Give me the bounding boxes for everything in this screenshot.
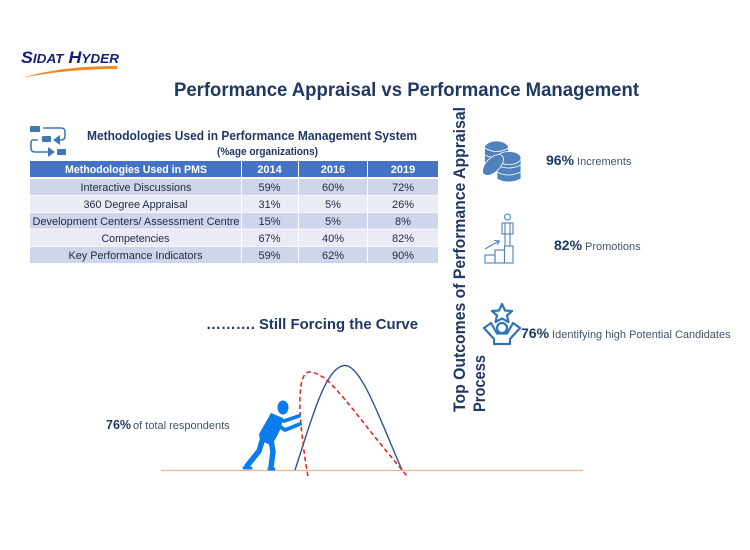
chart: bell curves [295,366,407,476]
table header row [65,164,415,176]
row: Development Centers [32,216,411,228]
row: Interactive Discussions: Interactive Discussions [80,182,192,194]
row: 360 Degree Appraisal: 31% [258,199,281,211]
icon: star person [484,304,520,344]
icon: person on steps [485,214,513,263]
row: Development Centers: Development Centers/ Assessment Centre [32,216,240,228]
table heading [87,129,417,158]
stat: 76% of total respondents: 76%of total respondents [106,418,230,432]
icon: coins [479,141,521,182]
row: 360 Degree Appraisal: 5% [325,199,341,211]
table header row: 2019 [391,164,415,176]
row: Key Performance Indicators: 59% [258,250,281,262]
subheading: still forcing the curve: ………. Still Forcing the Curve [206,316,418,333]
row: Competencies: 82% [392,233,414,245]
row: Key Performance Indicators [68,250,414,262]
row: 360 Degree Appraisal: 26% [392,199,414,211]
row: Interactive Discussions: 72% [392,182,414,194]
row: 360 Degree Appraisal [84,199,414,211]
vertical heading: top outcomes [451,107,489,412]
row: Competencies: 40% [322,233,344,245]
logo: Sidat Hyder [21,49,119,78]
row: Key Performance Indicators: 62% [322,250,344,262]
row: Development Centers: 8% [395,216,411,228]
row: Development Centers: 15% [258,216,281,228]
stat: 96% increments: 96% Increments [546,152,632,168]
icon: person pushing [244,400,300,469]
table: methodologies used in PMS [30,161,438,263]
table header row: 2014 [257,164,283,176]
table header row: 2016 [321,164,345,176]
icon: process flow [30,126,66,157]
row: Competencies: Competencies [102,233,170,245]
row: Interactive Discussions: 60% [322,182,344,194]
baseline axis [161,470,583,472]
vertical heading: top outcomes: Process [471,355,489,412]
vertical heading: top outcomes: Top Outcomes of Performance Appraisal [451,107,469,412]
row: Interactive Discussions: 59% [258,182,281,194]
table header row: Methodologies Used in PMS [65,164,207,176]
row: 360 Degree Appraisal: 360 Degree Appraisal [84,199,188,211]
row: Key Performance Indicators: 90% [392,250,414,262]
title: Performance Appraisal vs Performance Management [174,79,639,101]
stat: 82% promotions: 82% Promotions [554,237,641,253]
row: Interactive Discussions [80,182,414,194]
row: Key Performance Indicators: Key Performance Indicators [68,250,203,262]
row: Competencies: 67% [258,233,281,245]
table heading: Methodologies Used in Performance Management System [87,129,417,143]
row: Development Centers: 5% [325,216,341,228]
table heading: (%age organizations) [217,146,318,158]
logo: Sidat Hyder: SIDAT HYDER [21,49,119,67]
row: Competencies [102,233,414,245]
stat: 76% identifying high potential candidates: 76% Identifying high Potential Candidates [521,325,731,341]
